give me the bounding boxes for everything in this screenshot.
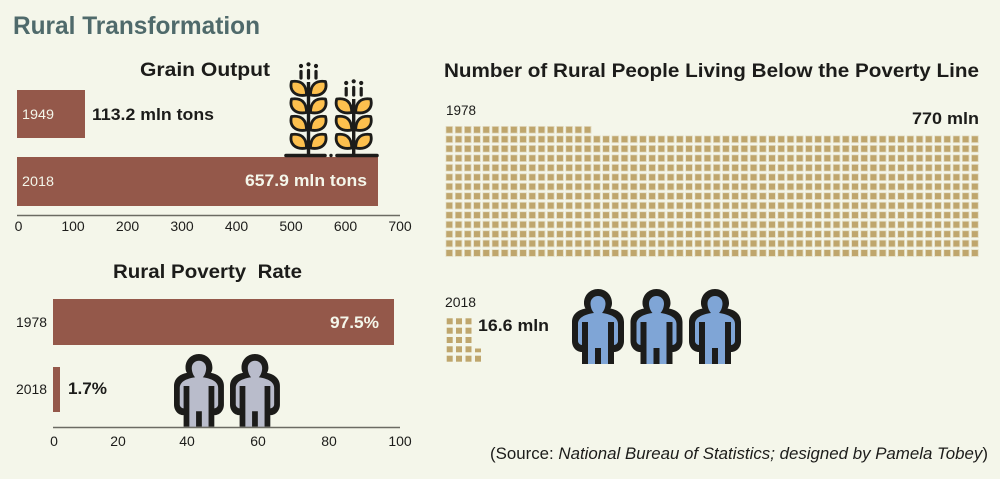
unit chart: 1978 — [446, 130, 979, 253]
axis: grain output: 100 — [61, 218, 85, 234]
bar: 1978 rate: 97.5% — [330, 313, 379, 332]
axis: grain output: 200 — [116, 218, 139, 234]
bar: 2018 rate: 1.7% — [68, 379, 107, 398]
unit chart: 2018 — [447, 318, 481, 362]
bar: 1978 rate — [16, 299, 394, 345]
axis: poverty rate: 100 — [388, 433, 412, 449]
axis: grain output: 300 — [170, 218, 194, 234]
heading: grain output: Grain Output — [140, 60, 271, 81]
bar: 1978 rate: 1978 — [16, 314, 47, 330]
axis: poverty rate — [50, 428, 412, 449]
axis: grain output: 0 — [15, 218, 23, 234]
bar: 2018 grain — [17, 157, 378, 206]
panel: rural people below poverty line — [444, 61, 979, 364]
axis: poverty rate: 40 — [179, 433, 195, 449]
axis: poverty rate: 0 — [50, 433, 58, 449]
icon: blue people — [572, 289, 741, 364]
icon: wheat stalks — [286, 62, 377, 157]
value: 16.6 mln: 16.6 mln — [478, 316, 549, 335]
panel: rural poverty rate chart — [16, 262, 412, 449]
bar: 2018 rate: 2018 — [16, 381, 47, 397]
label: 2018: 2018 — [445, 294, 476, 310]
bar: 1949 grain: 1949 — [22, 106, 54, 122]
axis: grain output: 600 — [334, 218, 357, 234]
axis: grain output: 700 — [388, 218, 412, 234]
axis: grain output: 500 — [279, 218, 303, 234]
bar: 2018 grain: 2018 — [22, 173, 54, 189]
value: 113.2 mln tons: 113.2 mln tons — [92, 105, 214, 124]
axis: poverty rate: 20 — [110, 433, 126, 449]
source note: (Source: National Bureau of Statistics; designed by Pamela Tobey) — [490, 444, 988, 463]
axis: grain output — [15, 216, 412, 234]
bar: 2018 grain: 657.9 mln tons — [245, 171, 367, 190]
axis: grain output: 400 — [225, 218, 248, 234]
heading: poverty line: Number of Rural People Living Below the Poverty Line — [444, 61, 979, 82]
bar: 1949 grain — [17, 90, 85, 138]
axis: poverty rate: 60 — [250, 433, 266, 449]
panel: grain output chart — [15, 60, 412, 234]
heading: rural poverty rate: Rural Poverty Rate — [113, 262, 302, 283]
icon: grey people — [174, 354, 280, 427]
title: Rural Transformation — [13, 12, 260, 40]
value: 770 mln: 770 mln — [912, 109, 979, 128]
axis: poverty rate: 80 — [321, 433, 337, 449]
label: 1978: 1978 — [446, 102, 476, 118]
bar: 2018 rate — [16, 367, 107, 412]
